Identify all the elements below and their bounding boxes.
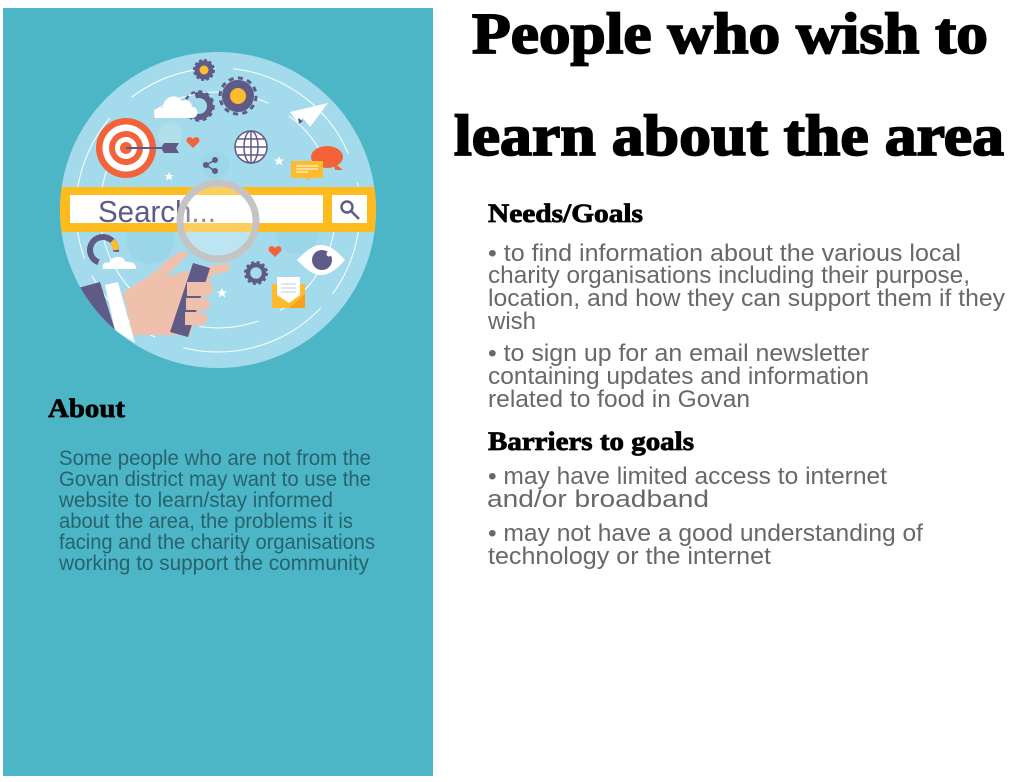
title: learn about the area <box>454 103 1004 168</box>
icon: stars <box>164 156 284 298</box>
text: about description: Some people who are not from the <box>59 447 371 470</box>
text: barriers list <box>487 463 923 570</box>
search bar <box>58 187 378 232</box>
icon: search button <box>342 202 359 219</box>
icon: large gear <box>220 78 256 114</box>
icon: eye <box>297 245 345 275</box>
icon: target with arrow <box>96 118 179 178</box>
icon: speech bubbles <box>291 146 343 181</box>
text: needs and goals list: • to sign up for an email newsletter <box>488 340 869 367</box>
text: about description: working to support the community <box>58 552 369 575</box>
icon: heart <box>187 137 199 148</box>
icon: paper plane <box>290 103 328 127</box>
title <box>454 1 1004 168</box>
icon: cloud <box>154 96 197 118</box>
icon: heart <box>269 246 281 257</box>
icon: donut chart with cloud <box>86 233 136 269</box>
icon: share <box>204 158 217 173</box>
illustration: search concept circle <box>58 52 378 368</box>
text: barriers list: technology or the internet <box>488 543 771 570</box>
text: needs and goals list: charity organisations including their purpose, <box>488 262 970 289</box>
icon: small gear <box>194 60 214 80</box>
text: barriers list: • may not have a good understanding of <box>488 520 923 547</box>
text: needs and goals list: wish <box>487 308 536 335</box>
icon: broken gear <box>184 92 214 120</box>
panel: about sidebar <box>3 8 433 776</box>
text: about description <box>58 447 375 575</box>
text: barriers list: and/or broadband <box>487 486 709 513</box>
heading: needs and goals: Needs/Goals <box>488 199 643 228</box>
text: needs and goals list: related to food in Govan <box>488 386 750 413</box>
icon: gear <box>245 262 267 284</box>
heading: barriers to goals: Barriers to goals <box>488 427 694 456</box>
illustration: hand holding magnifier <box>78 183 256 343</box>
title: People who wish to <box>472 1 988 66</box>
text: needs and goals list <box>487 240 1005 413</box>
text: about description: facing and the charity organisations <box>59 531 375 554</box>
text: barriers list: • may have limited access to internet <box>488 463 887 490</box>
heading: about: About <box>48 394 125 423</box>
icon: envelope <box>272 277 305 308</box>
search label: Search... <box>98 194 216 229</box>
text: about description: Govan district may want to use the <box>59 468 371 491</box>
text: needs and goals list: containing updates and information <box>488 363 869 390</box>
text: about description: about the area, the problems it is <box>59 510 353 533</box>
text: about description: website to learn/stay informed <box>58 489 333 512</box>
text: needs and goals list: • to find information about the various local <box>488 240 961 267</box>
icon: globe <box>235 131 267 163</box>
text: needs and goals list: location, and how they can support them if they <box>488 285 1005 312</box>
